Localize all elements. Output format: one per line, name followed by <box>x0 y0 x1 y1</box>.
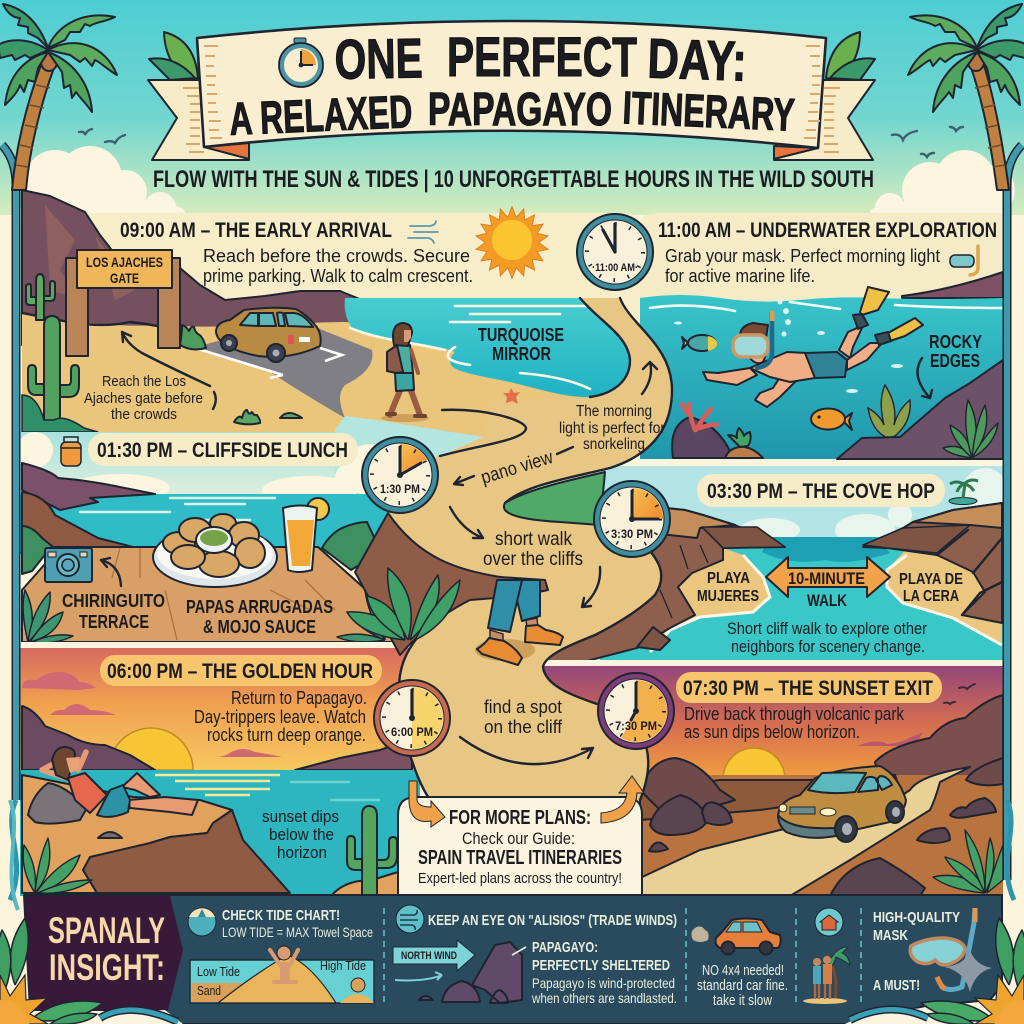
purple headland <box>22 463 155 510</box>
panel: 03:30 cove hop scene <box>540 466 1007 668</box>
label: Reach the Los Ajaches gate: Reach the Los <box>102 373 186 390</box>
woman relaxing <box>28 747 198 824</box>
callout: for more plans <box>398 797 642 895</box>
panel: Spanaly insight strip <box>24 895 1002 1024</box>
find a spot note <box>484 697 563 737</box>
callout: for more plans: Check our Guide: <box>462 829 575 848</box>
coral and weed <box>672 385 910 458</box>
arrow rocky edges <box>918 358 932 398</box>
callout: for more plans: Expert-led plans across the country! <box>418 870 622 887</box>
cove description: neighbors for scenery change. <box>731 637 925 656</box>
snorkeling note: light is perfect for <box>559 420 665 437</box>
right bush <box>322 522 381 570</box>
title text: PERFECT <box>447 25 637 88</box>
brown cliff <box>22 492 133 547</box>
arrow to camera <box>101 558 121 586</box>
label: Reach the Los Ajaches gate: the crowds <box>111 406 177 423</box>
arrow: callout left <box>409 781 445 827</box>
clock: 6:00 PM <box>374 680 450 756</box>
heading pill: 07:30: 07:30 PM – THE SUNSET EXIT <box>683 677 933 700</box>
clock: 6:00 PM: 6:00 PM <box>391 727 433 739</box>
tip: check tide chart <box>188 907 373 940</box>
right boulders <box>830 758 1003 896</box>
green shrub <box>180 325 206 349</box>
winding sand path <box>382 298 672 800</box>
labels: beaches and walk: LA CERA <box>903 588 959 605</box>
sheltered tip text: when others are sandlasted. <box>531 990 677 1006</box>
label: turquoise mirror: MIRROR <box>492 344 551 364</box>
sunset exit description: as sun dips below horizon. <box>684 722 860 742</box>
banner leaves: right <box>826 32 875 80</box>
heading: 11:00 <box>658 219 997 286</box>
parked car <box>216 308 321 362</box>
tip: high-quality mask: MASK <box>873 927 908 944</box>
beach sand <box>22 313 640 440</box>
north wind arrow: NORTH WIND <box>401 950 457 962</box>
left bush <box>22 526 52 574</box>
title text: PAPAGAYO <box>428 83 612 135</box>
heading: 09:00: prime parking. Walk to calm crescent. <box>203 265 473 286</box>
short walk note <box>483 529 583 570</box>
right mountains <box>875 695 1003 790</box>
tide diagram <box>190 946 374 1003</box>
labels: terrace and dish: & MOJO SAUCE <box>203 617 316 637</box>
labels: beaches and walk: WALK <box>807 591 848 610</box>
sunset caption: sunset dips <box>262 808 339 826</box>
cove description: Short cliff walk to explore other <box>727 619 927 638</box>
tip: no 4x4 car <box>691 918 788 1009</box>
cliff rock <box>83 810 290 893</box>
turquoise mirror sea <box>345 298 630 397</box>
find a spot note: find a spot <box>484 697 562 717</box>
cove description <box>727 619 927 656</box>
cream sky <box>640 213 1003 308</box>
label: rocky edges: ROCKY <box>929 332 982 352</box>
right rocks <box>837 360 1003 459</box>
right beach <box>887 548 1002 643</box>
labels: beaches and walk <box>697 569 963 610</box>
insight title block: INSIGHT: <box>49 947 165 988</box>
insight title block <box>25 896 183 1010</box>
foreground plant <box>23 838 92 893</box>
palm tree: right <box>908 4 1024 190</box>
small shrub and rocks <box>234 410 302 424</box>
label: rocky edges <box>929 332 982 371</box>
tip: no 4x4 car: standard car fine. <box>697 978 788 994</box>
tropical plant on rock <box>943 400 998 458</box>
sea <box>600 537 1004 660</box>
heading pill: 06:00: 06:00 PM – THE GOLDEN HOUR <box>107 660 373 683</box>
title text: A RELAXED <box>228 85 413 145</box>
sun icon <box>476 206 548 279</box>
sun <box>109 728 193 770</box>
find a spot note: on the cliff <box>484 717 563 737</box>
north wind arrow <box>393 940 475 980</box>
callout: for more plans: FOR MORE PLANS: <box>449 807 591 829</box>
tip: trade winds heading: KEEP AN EYE ON "ALISIOS" (TRADE WINDS) <box>428 912 677 929</box>
dashed dividers <box>384 908 861 1002</box>
purple mountains <box>22 190 420 345</box>
lush green point <box>504 472 605 525</box>
icon: small mask and snorkel <box>950 246 978 275</box>
starfish <box>503 388 520 404</box>
orange fish <box>811 408 852 430</box>
callout: for more plans: SPAIN TRAVEL ITINERARIES <box>418 847 622 869</box>
walkway swirl line <box>440 410 526 456</box>
clock: 7:30 PM <box>598 673 674 749</box>
snorkeling note: The morning <box>576 403 652 420</box>
labels: terrace and dish <box>62 591 333 637</box>
title banner <box>197 21 826 148</box>
mountains <box>22 706 155 770</box>
title text: ITINERARY <box>622 81 796 141</box>
heading: 09:00: 09:00 AM – THE EARLY ARRIVAL <box>120 218 392 242</box>
leafy plants <box>23 590 385 643</box>
pink clouds <box>22 672 282 757</box>
sunset caption: below the <box>269 826 334 844</box>
panel: 11:00 underwater exploration scene <box>640 213 1003 459</box>
heading: 11:00: Grab your mask. Perfect morning light <box>665 245 940 266</box>
SUV driving <box>778 766 906 842</box>
plate of papas arrugadas <box>153 514 277 587</box>
sheltered tip text: Papagayo is wind-protected <box>532 975 675 991</box>
clock: 1:30 PM: 1:30 PM <box>380 484 420 496</box>
insight title block: SPANALY <box>48 910 165 951</box>
tip: no 4x4 car: take it slow <box>713 993 772 1009</box>
arrow from short walk <box>582 567 600 607</box>
walking woman <box>381 323 429 422</box>
Los Ajaches gate sign <box>66 250 180 356</box>
label: rocky edges: EDGES <box>930 351 980 371</box>
corner: bottom-left foliage and sun <box>0 918 183 1024</box>
heading: 11:00: for active marine life. <box>665 265 815 286</box>
terrace wood <box>22 547 400 642</box>
dusk cloud and birds <box>857 732 923 746</box>
arrow: cliff spot <box>460 737 593 764</box>
arrow: callout right <box>601 776 644 823</box>
side borders <box>2 145 1022 910</box>
band <box>20 642 410 650</box>
clock: 3:30 PM: 3:30 PM <box>611 529 653 541</box>
clock: 11:00 AM <box>577 214 653 290</box>
labels: beaches and walk: PLAYA <box>707 570 750 587</box>
title text <box>228 25 796 145</box>
label: turquoise mirror: TURQUOISE <box>478 325 564 345</box>
clock: 7:30 PM: 7:30 PM <box>615 721 657 733</box>
distant headland <box>902 272 1003 298</box>
sheltered tip text <box>512 939 677 1006</box>
label: turquoise mirror <box>478 325 564 364</box>
tip: high-quality mask: A MUST! <box>873 977 920 994</box>
sunset sky <box>20 648 420 770</box>
left cliffs <box>540 505 785 668</box>
rocks <box>419 942 522 1003</box>
central brown cliff <box>355 513 548 655</box>
clock: 11:00 AM: ·11:00 AM· <box>592 262 638 274</box>
short-walk arrow <box>450 507 483 538</box>
banner tails and fold <box>148 80 875 160</box>
golden hour description <box>194 688 367 745</box>
labels: terrace and dish: PAPAS ARRUGADAS <box>186 597 333 617</box>
small rock <box>98 832 122 838</box>
orange juice glass <box>283 498 329 572</box>
snorkeler <box>703 287 923 407</box>
golden hour description: Return to Papagayo. <box>231 688 367 708</box>
labels: beaches and walk: MUJERES <box>697 588 759 605</box>
short walk note: short walk <box>495 529 572 550</box>
sheltered tip text: PERFECTLY SHELTERED <box>532 957 670 974</box>
clock: 3:30 PM <box>594 481 670 557</box>
clouds <box>15 146 1015 226</box>
double arrow: 10-minute walk <box>766 557 890 597</box>
short walk note: over the cliffs <box>483 549 583 570</box>
heading pill: 01:30 <box>88 433 358 466</box>
Los Ajaches gate sign: LOS AJACHES <box>86 255 163 270</box>
blue fish <box>682 335 717 351</box>
tip: no 4x4 car: NO 4x4 needed! <box>702 963 784 979</box>
snorkeling note: snorkeling <box>583 436 645 453</box>
cactus <box>347 806 397 895</box>
icon: juice jar <box>61 437 81 466</box>
panel: 01:30 cliffside lunch scene <box>17 416 483 643</box>
icon: people and palm <box>803 947 850 1004</box>
labels: beaches and walk: 10-MINUTE <box>788 569 865 588</box>
stopwatch icon <box>279 38 323 87</box>
heading: 09:00 <box>120 218 473 286</box>
birds <box>79 127 963 157</box>
title text: DAY: <box>647 26 748 93</box>
panel: 09:00 early arrival scene <box>20 190 640 440</box>
tide diagram: High Tide <box>320 958 366 973</box>
sunset caption <box>262 808 339 862</box>
ground <box>640 775 1003 895</box>
heading pill: 03:30 <box>697 474 945 507</box>
title text: ONE <box>334 26 423 91</box>
band <box>540 660 1004 667</box>
labels: terrace and dish: TERRACE <box>79 612 149 632</box>
sheltered tip text: PAPAGAYO: <box>532 939 598 956</box>
tip: check tide chart: CHECK TIDE CHART! <box>222 907 340 924</box>
camera <box>45 548 92 582</box>
left beach <box>640 545 770 650</box>
bubbles <box>674 300 903 393</box>
tip: high-quality mask <box>873 908 992 994</box>
tip: check tide chart: LOW TIDE = MAX Towel Space <box>222 924 373 940</box>
banner leaves: left <box>149 32 198 80</box>
sky <box>0 0 1024 215</box>
label: Reach the Los Ajaches gate: Ajaches gate before <box>84 390 203 407</box>
heading pill: 03:30: 03:30 PM – THE COVE HOP <box>707 480 935 503</box>
strip background <box>24 895 1002 1024</box>
road and parking <box>192 325 372 418</box>
panel: 06:00 golden hour scene <box>20 642 420 896</box>
dusk sky <box>540 666 1004 784</box>
snorkeling note <box>559 403 665 453</box>
sand corner <box>332 872 398 895</box>
central green plant <box>347 568 460 640</box>
labels: beaches and walk: PLAYA DE <box>899 571 963 588</box>
water <box>640 295 1003 459</box>
pale sky reaching under the beach <box>335 416 483 494</box>
golden hour description: Day-trippers leave. Watch <box>194 707 366 727</box>
heading: 09:00: Reach before the crowds. Secure <box>203 245 470 266</box>
hiker legs and boots <box>475 580 563 665</box>
golden hour description: rocks turn deep orange. <box>207 725 366 745</box>
cacti <box>22 274 98 432</box>
icon: house <box>815 908 843 936</box>
heading pill: 01:30: 01:30 PM – CLIFFSIDE LUNCH <box>97 439 348 462</box>
arrow up toward snorkeling <box>642 362 657 394</box>
labels: terrace and dish: CHIRINGUITO <box>62 591 165 611</box>
left boulders <box>640 758 735 852</box>
label: Reach the Los Ajaches gate <box>84 373 203 423</box>
tip: trade winds heading <box>396 905 677 933</box>
sunset caption: horizon <box>277 844 327 862</box>
cream sky of morning panel <box>20 213 640 333</box>
panel: 07:30 sunset exit scene <box>540 660 1004 896</box>
arrow to gate <box>122 332 216 409</box>
foreground plant <box>933 830 1003 893</box>
tide diagram: Sand <box>197 983 221 998</box>
sea <box>20 770 420 896</box>
pano view note: pano view <box>479 447 556 489</box>
tip: high-quality mask: HIGH-QUALITY <box>873 909 960 926</box>
sky <box>20 432 405 494</box>
icon: palm island <box>949 480 978 504</box>
Los Ajaches gate sign: GATE <box>110 271 139 286</box>
tide diagram: Low Tide <box>197 964 240 979</box>
sea <box>20 494 405 554</box>
clock: 1:30 PM <box>362 437 438 513</box>
sky <box>600 466 1004 540</box>
cliff top <box>22 775 232 893</box>
heading pill: 06:00 <box>100 655 382 686</box>
road <box>640 767 970 896</box>
corner: bottom-right foliage and sun <box>845 918 1024 1024</box>
sunset exit description <box>684 704 905 742</box>
right cliffs <box>863 503 1002 623</box>
sunset exit description: Drive back through volcanic park <box>684 704 905 724</box>
palm tree: left <box>0 4 117 190</box>
pano view arrow <box>454 447 573 485</box>
sun <box>723 748 785 779</box>
heading pill: 07:30 <box>676 672 942 703</box>
wind icon <box>408 221 438 243</box>
